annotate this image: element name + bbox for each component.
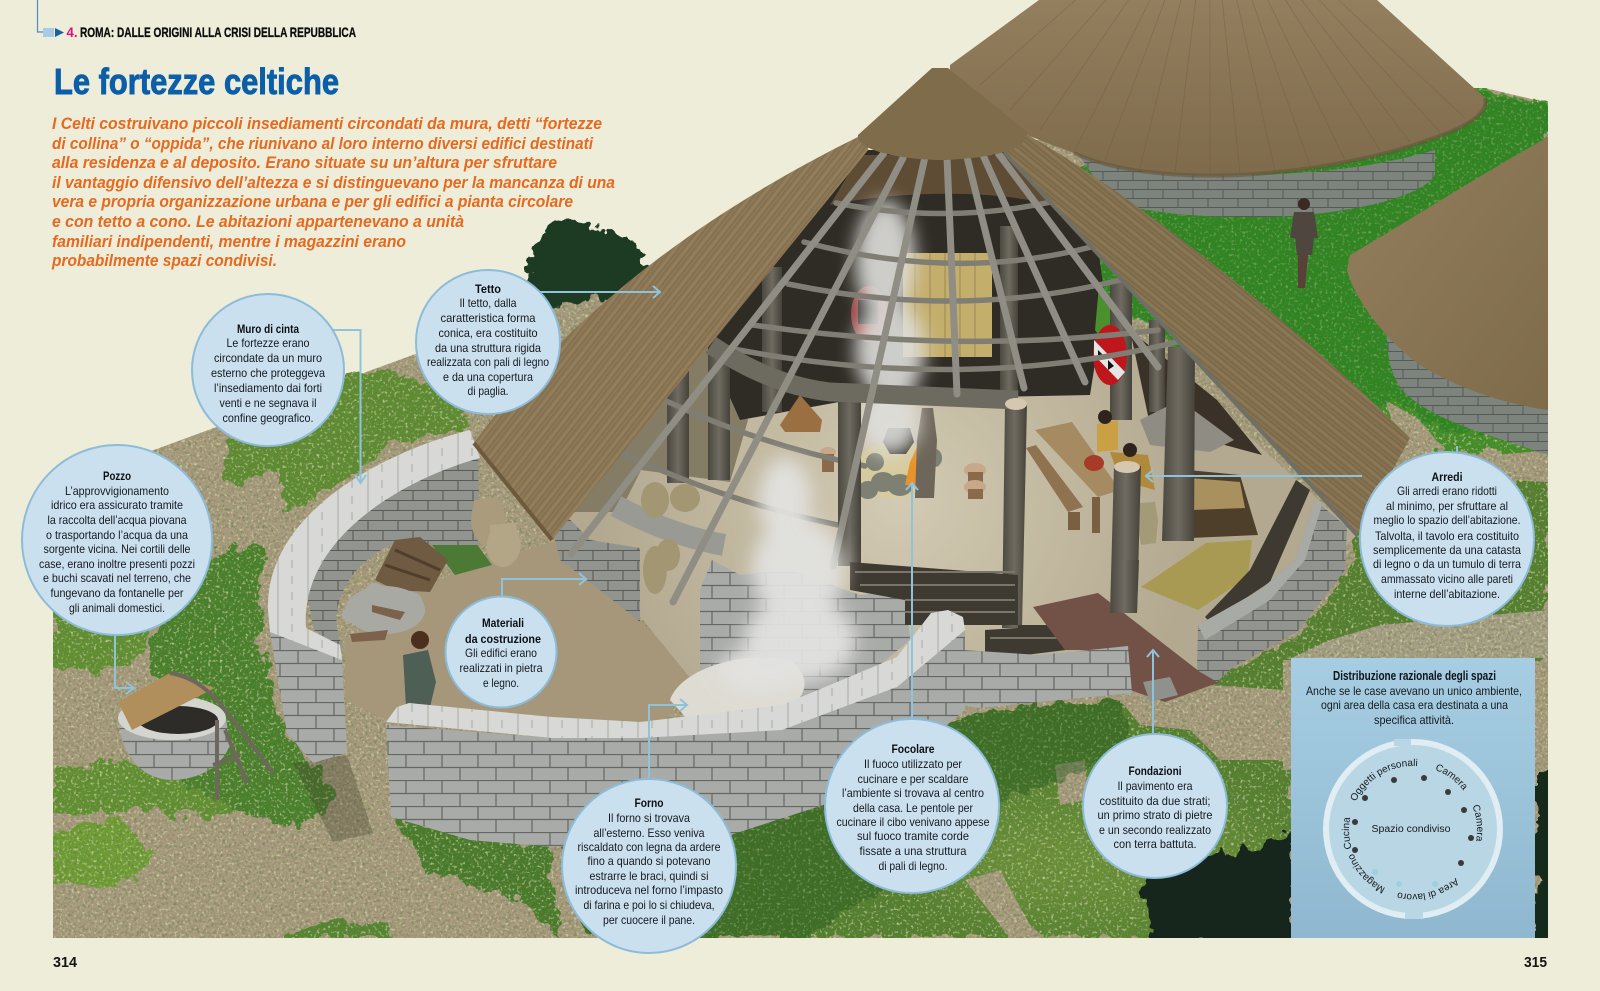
body text: e un secondo realizzato (1099, 823, 1211, 837)
rugs (1141, 470, 1258, 610)
smoke rising from the hearth (855, 200, 925, 455)
right hut: wall (1387, 335, 1548, 455)
body text: da una struttura rigida (435, 341, 541, 355)
body text: sul fuoco tramite corde (857, 829, 969, 843)
walking man (1290, 198, 1318, 288)
body text: Talvolta, il tavolo era costituito (1375, 529, 1519, 543)
front yard wall (386, 610, 965, 847)
body text: Gli arredi erano ridotti (1397, 484, 1497, 498)
background hut: wall (1075, 150, 1435, 217)
body text: idrico era assicurato tramite (51, 498, 183, 512)
panel: Distribuzione razionale degli spazi (1291, 658, 1535, 938)
curved area labels: Oggetti personali (1350, 758, 1418, 800)
bubble (1360, 452, 1534, 626)
bubble (416, 270, 560, 414)
body text: e da una copertura (443, 370, 533, 384)
roof frame: rings (616, 201, 1177, 529)
grass patch in the yard (432, 545, 492, 575)
tree behind the roof (524, 218, 649, 309)
bubble (446, 596, 556, 708)
heading (465, 616, 541, 646)
dark bushes at the bottom right (1145, 772, 1555, 950)
body text: venti e ne segnava il (220, 396, 316, 410)
main house: interior floor (570, 338, 1357, 690)
inner thatch under the cap (830, 155, 1050, 205)
well drum (118, 718, 230, 780)
seated women with fruit bowl (1084, 410, 1155, 490)
body text: realizzati in pietra (460, 661, 543, 675)
dark recess under the right roof (1130, 330, 1262, 455)
body text: Il fuoco utilizzato per (864, 757, 962, 771)
heading: Pozzo (103, 469, 131, 483)
body text (1373, 484, 1521, 601)
beaten earth entrance floor (1033, 593, 1220, 702)
bubble (1083, 734, 1227, 878)
intro text: vera e propria organizzazione urbana e per gli edifici a pianta circolare (52, 193, 573, 211)
intro text: il vantaggio difensivo dell’altezza e si distinguevano per la mancanza di una (52, 174, 615, 192)
floor plan diagram (1323, 739, 1503, 919)
body text (427, 296, 549, 398)
intro text (51, 115, 615, 270)
central posts (838, 347, 1195, 628)
arrow (1147, 650, 1159, 735)
body text: un primo strato di pietre (1098, 808, 1213, 822)
central stone wall (700, 560, 910, 705)
center label: Spazio condiviso (1372, 824, 1451, 835)
heading: Fondazioni (1128, 764, 1182, 778)
doorway gaps (1394, 739, 1423, 919)
panel text (1306, 684, 1522, 727)
storage jars in the yard (471, 497, 521, 567)
body text: introduceva nel forno l’impasto (575, 883, 723, 897)
intro text: di collina” o “oppida”, che riunivano al loro interno diversi edifici destinati (52, 135, 593, 153)
post dots (1352, 775, 1474, 866)
main house right wall (1197, 500, 1347, 682)
body text: al minimo, per sfruttare al (1386, 499, 1508, 513)
body text: estrarre le braci, quindi si (590, 869, 708, 883)
body text: case, erano inoltre presenti pozzi (39, 557, 195, 571)
body text: con terra battuta. (1114, 837, 1196, 851)
body text: realizzata con pali di legno (427, 355, 549, 369)
callout: Pozzo (22, 445, 212, 694)
main house: dark back wall (705, 150, 1105, 420)
bubble (562, 779, 736, 953)
table and bench (1026, 422, 1120, 533)
hearth with stones, fire and cauldron (853, 428, 942, 499)
grass seen through the gap (1095, 293, 1110, 334)
plan circle (1326, 742, 1500, 916)
faded shield behind the smoke (851, 286, 887, 342)
body text: ammassato vicino alle pareti (1381, 572, 1513, 586)
body text (836, 757, 990, 873)
body text: di legno o da un tumulo di terra (1373, 557, 1521, 571)
body text: interne dell’abitazione. (1394, 587, 1500, 601)
clay jars behind the wall (641, 482, 700, 594)
body text: circondate da un muro (214, 351, 322, 365)
man in green tunic (403, 631, 436, 707)
body text: riscaldato con legna da ardere (578, 840, 721, 854)
panel text: specifica attività. (1374, 713, 1454, 727)
curved area labels: Magazzino (1349, 854, 1385, 894)
bubble (22, 445, 212, 635)
body text: di paglia. (468, 384, 508, 398)
body text: Le fortezze erano (226, 336, 310, 350)
body text: fino a quando si potevano (588, 854, 711, 868)
redraw post base over entrance (1110, 560, 1139, 613)
woman at the fire (915, 408, 937, 498)
body text: Il forno si trovava (608, 811, 690, 825)
body text: di farina e poi lo si chiudeva, (584, 898, 714, 912)
background hut: thatched roof (950, 0, 1486, 176)
stools (820, 447, 986, 499)
intro text: alla residenza e al deposito. Erano situate su un’altura per sfruttare (52, 154, 557, 172)
smoke from the oven (718, 458, 856, 692)
wall shadow on the ground (293, 755, 373, 842)
panel text: Anche se le case avevano un unico ambiente, (1306, 684, 1522, 698)
right wattle fence (1205, 480, 1310, 622)
body text: all’esterno. Esso veniva (594, 826, 705, 840)
left ring wall (548, 505, 640, 622)
body text: e buchi scavati nel terreno, che (43, 571, 191, 585)
main roof: left slab (474, 130, 872, 540)
body text: sorgente vicina. Nei cortili delle (44, 542, 191, 556)
heading: Muro di cinta (237, 322, 299, 336)
curved area labels: Camera (1436, 764, 1466, 790)
curved area labels: Area di lavoro (1398, 878, 1458, 900)
stone heap (342, 583, 425, 642)
pale post dots (1372, 869, 1438, 887)
body text: conica, era costituito (438, 326, 538, 340)
page number left: 314 (53, 954, 78, 971)
arrow (333, 330, 366, 483)
main roof: thatched cap (858, 68, 1027, 160)
callout: Materiali da costruzione (446, 573, 586, 708)
body text: Il tetto, dalla (460, 296, 517, 310)
heading: da costruzione (465, 632, 541, 646)
body text: e legno. (483, 676, 519, 690)
body text (460, 646, 543, 690)
body text: L’approvvigionamento (65, 484, 169, 498)
arrow (906, 483, 918, 722)
callout: Tetto (416, 270, 660, 414)
body text: costituito da due strati; (1100, 794, 1210, 808)
wattle fence (850, 562, 1066, 660)
well (118, 673, 273, 800)
main roof: right slab (1004, 125, 1410, 535)
body text: o trasportando l’acqua da una (46, 528, 188, 542)
roof frame: rafters (571, 153, 1158, 602)
deep green tint over the grass beside the front wall (560, 700, 1125, 938)
intro text: e con tetto a cono. Le abitazioni appartenevano a unità (52, 213, 464, 231)
bubble (825, 719, 999, 893)
body text: fungevano da fontanelle per (50, 586, 184, 600)
arrow (115, 635, 134, 694)
body text: gli animali domestici. (69, 601, 165, 615)
title: Le fortezze celtiche (54, 61, 339, 102)
body text: cucinare il cibo venivano appese (836, 815, 990, 829)
callout: Forno (562, 699, 736, 953)
roof frame: main log beam (711, 345, 1027, 410)
body text: Gli edifici erano (465, 646, 537, 660)
well sweep (170, 673, 273, 800)
clay jar by the post (1137, 502, 1158, 545)
body text: meglio lo spazio dell’abitazione. (1374, 513, 1520, 527)
deep green tint over the meadow behind the huts (1060, 95, 1548, 440)
arrow (649, 699, 687, 782)
body text: fissate a una struttura (860, 844, 967, 858)
body text: Il pavimento era (1118, 779, 1193, 793)
bread oven (670, 657, 804, 722)
body text: per cuocere il pane. (603, 913, 695, 927)
panel background (1291, 658, 1535, 938)
callout: Focolare (825, 483, 999, 893)
chapter number: 4. (66, 24, 78, 40)
panel text: ogni area della casa era destinata a una (1321, 698, 1508, 712)
callout: Fondazioni (1083, 650, 1227, 878)
body text: caratteristica forma (440, 311, 536, 325)
curved area labels: Camera (1473, 805, 1482, 842)
log pile (375, 537, 448, 592)
body text (39, 484, 195, 615)
body text (575, 811, 723, 927)
front post at the entrance (1110, 461, 1141, 613)
main house: inner wall, left (574, 348, 748, 512)
bubble (192, 294, 344, 446)
running head (38, 0, 356, 40)
section marker (38, 0, 64, 37)
page number right: 315 (1524, 954, 1547, 971)
right hut: thatched roof (1347, 137, 1548, 410)
firewood stack (780, 395, 822, 432)
callout: Arredi (1146, 446, 1534, 626)
body text: cucinare e per scaldare (858, 772, 969, 786)
intro text: familiari indipendenti, mentre i magazzini erano (52, 233, 406, 251)
body text: confine geografico. (222, 411, 314, 425)
body text (211, 336, 325, 425)
intro text: probabilmente spazi condivisi. (51, 252, 277, 270)
bed with grey sheets (1140, 407, 1234, 452)
curved area labels (1342, 758, 1482, 900)
body text: semplicemente da una catasta (1373, 543, 1521, 557)
heading: Materiali (482, 616, 524, 630)
red shield (1093, 325, 1127, 385)
heading: Tetto (475, 282, 501, 296)
yard floor (345, 540, 700, 725)
hanging yellow curtain (903, 253, 992, 357)
heading: Arredi (1432, 470, 1462, 484)
wooden lid (118, 673, 215, 730)
body text: l’insediamento dai forti (214, 381, 322, 395)
heading: Focolare (892, 742, 935, 756)
body text: della casa. Le pentole per (853, 801, 973, 815)
body text: l’ambiente si trovava al centro (842, 786, 984, 800)
low foundation wall (963, 646, 1178, 708)
outer wall: inner face (306, 450, 480, 650)
back posts (667, 226, 1165, 483)
curved area labels: Cucina (1342, 818, 1351, 849)
arrow (1146, 446, 1457, 482)
outer wall: top course and outer face (268, 430, 480, 763)
body text: esterno che proteggeva (211, 366, 325, 380)
body text: la raccolta dell’acqua piovana (48, 513, 187, 527)
callout: Muro di cinta (192, 294, 366, 483)
body text: di pali di legno. (878, 859, 948, 873)
intro text: I Celti costruivano piccoli insediamenti circondati da mura, detti “fortezze (52, 115, 602, 133)
arrow (540, 286, 660, 298)
panel heading: Distribuzione razionale degli spazi (1333, 669, 1496, 683)
heading: Forno (634, 796, 664, 810)
chapter title: ROMA: DALLE ORIGINI ALLA CRISI DELLA REPUBBLICA (80, 24, 356, 40)
body text (1098, 779, 1213, 851)
stone lintel (616, 506, 724, 545)
arrow (502, 573, 586, 597)
